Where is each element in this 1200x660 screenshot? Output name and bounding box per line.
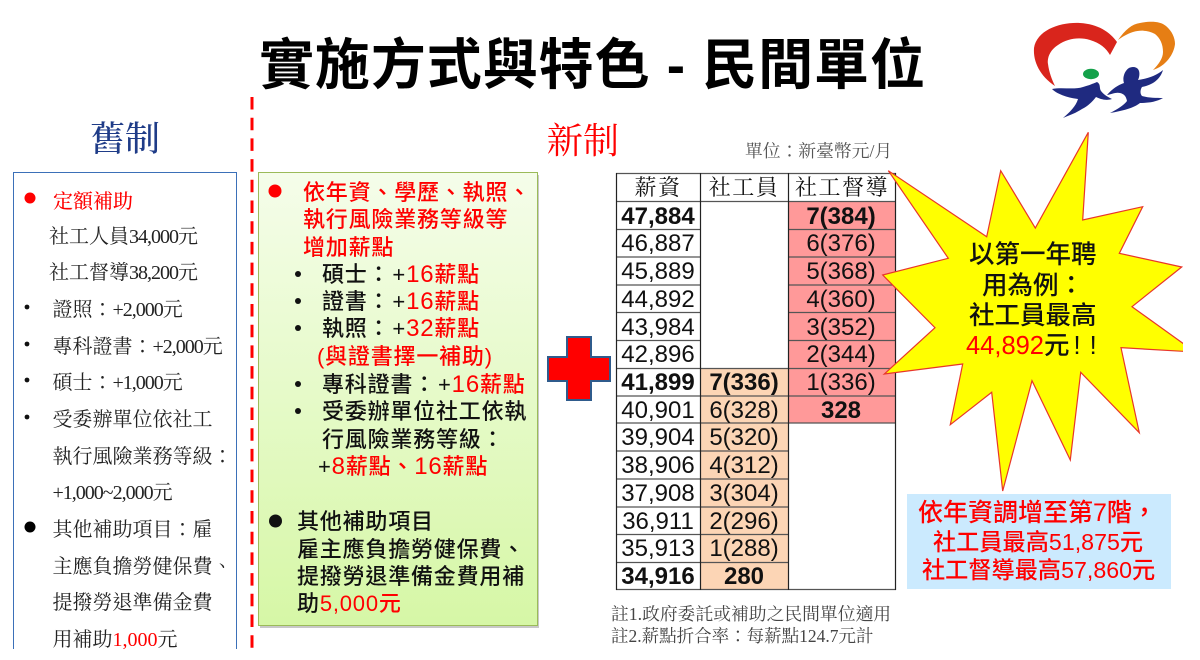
salary column: 45,889 xyxy=(621,258,695,285)
text: staff amounts: 社工人員34,000元 xyxy=(49,225,198,248)
salary column: 35,913 xyxy=(621,535,695,562)
salary column xyxy=(621,203,695,590)
salary column: 47,884 xyxy=(621,203,695,230)
table header xyxy=(635,176,886,197)
unit label: 單位：新臺幣元/月 xyxy=(745,140,892,161)
callout text: 社工員最高51,875元 xyxy=(933,529,1143,555)
bullet list: add-ons: 執行風險業務等級： xyxy=(52,445,232,468)
text: other subsidy: 主應負擔勞健保費、 xyxy=(52,555,232,578)
panel: old system xyxy=(14,172,236,660)
text: other subsidy: 提撥勞退準備金費 xyxy=(52,591,213,614)
salary column: 44,892 xyxy=(621,286,695,313)
bullet list: points: 執照：+32薪點 xyxy=(322,315,480,342)
callout text: 以第一年聘 xyxy=(969,241,1097,269)
text: other items: 提撥勞退準備金費用補 xyxy=(297,564,525,589)
text: salary points heading: 增加薪點 xyxy=(303,235,394,260)
social worker column: 7(336) xyxy=(709,369,779,396)
social worker column xyxy=(709,369,779,590)
salary column: 42,896 xyxy=(621,341,695,368)
table grid xyxy=(616,173,896,590)
text: other items xyxy=(297,509,525,616)
logo: left navy figure xyxy=(1052,82,1112,118)
logo: green dot xyxy=(1083,69,1099,79)
bullet list: points: 碩士：+16薪點 xyxy=(322,261,480,288)
callout text: 社工員最高 xyxy=(969,302,1097,330)
salary column: 46,887 xyxy=(621,230,695,257)
bullet: salary points xyxy=(268,184,282,198)
text: staff amounts: 社工督導38,200元 xyxy=(49,261,198,284)
dashed divider xyxy=(250,97,254,660)
bullet: other subsidy xyxy=(24,522,36,532)
salary column: 37,908 xyxy=(621,480,695,507)
text: other subsidy: 用補助1,000元 xyxy=(52,628,178,651)
heading: old system: 舊制 xyxy=(90,120,160,159)
social worker column: 2(296) xyxy=(709,508,779,535)
bullet: other items xyxy=(269,514,282,528)
bullet list: add-ons: 碩士：+1,000元 xyxy=(52,371,183,394)
bullet list: add-ons: 證照：+2,000元 xyxy=(52,298,183,321)
bullet list: points: +8薪點、16薪點 xyxy=(318,453,488,480)
panel: new system xyxy=(258,172,539,628)
supervisor column: 6(376) xyxy=(806,230,876,257)
salary column: 39,904 xyxy=(621,424,695,451)
callout text: 44,892元! ! xyxy=(966,332,1097,360)
table header: 社工督導 xyxy=(795,175,889,200)
text: salary points heading: 依年資、學歷、執照、 xyxy=(303,180,531,205)
callout: seniority maximum xyxy=(907,494,1171,589)
text: other subsidy: 其他補助項目：雇 xyxy=(52,518,212,541)
table cell fills xyxy=(700,202,896,590)
bullet list: points: 受委辦單位社工依執 xyxy=(322,399,527,424)
social worker column: 280 xyxy=(724,563,764,590)
salary column: 36,911 xyxy=(622,508,694,535)
text: other items: 其他補助項目 xyxy=(297,509,434,534)
social worker column: 6(328) xyxy=(709,397,779,424)
supervisor column: 1(336) xyxy=(806,369,876,396)
salary column: 41,899 xyxy=(621,369,695,396)
notes xyxy=(611,604,891,646)
social worker column: 5(320) xyxy=(709,424,779,451)
icon: plus xyxy=(548,337,610,400)
social worker column: 4(312) xyxy=(709,452,779,479)
social worker column: 1(288) xyxy=(709,535,779,562)
text: other subsidy xyxy=(52,518,232,651)
supervisor column: 5(368) xyxy=(806,258,876,285)
salary column: 34,916 xyxy=(621,563,695,590)
table header: 社工員 xyxy=(709,175,779,200)
bullet list: add-ons xyxy=(25,298,232,504)
text: other items: 雇主應負擔勞健保費、 xyxy=(297,537,525,562)
text: fixed subsidy: 定額補助 xyxy=(53,190,133,213)
callout text: 用為例： xyxy=(982,272,1084,300)
supervisor column xyxy=(806,203,876,424)
text: staff amounts xyxy=(49,225,198,284)
social worker column: 3(304) xyxy=(709,480,779,507)
callout text xyxy=(918,499,1157,583)
callout text: 依年資調增至第7階， xyxy=(918,499,1157,527)
supervisor column: 7(384) xyxy=(806,203,876,230)
supervisor column: 2(344) xyxy=(806,341,876,368)
bullet list: points: 行風險業務等級： xyxy=(322,427,504,452)
table header: 薪資 xyxy=(634,175,682,200)
bullet list: points xyxy=(295,261,527,480)
salary table xyxy=(616,173,896,590)
salary column: 38,906 xyxy=(621,452,695,479)
bullet list: add-ons: +1,000~2,000元 xyxy=(52,482,173,504)
text: salary points heading xyxy=(303,180,531,260)
salary column: 40,901 xyxy=(621,397,695,424)
callout: starburst xyxy=(883,132,1195,491)
supervisor column: 328 xyxy=(821,397,861,424)
notes: 註1.政府委託或補助之民間單位適用 xyxy=(611,604,891,624)
callout text: 社工督導最高57,860元 xyxy=(922,557,1155,583)
title: 實施方式與特色 - 民間單位 xyxy=(259,34,925,96)
logo: orange heart arc xyxy=(1118,22,1175,70)
bullet list: points: 專科證書：+16薪點 xyxy=(322,371,526,398)
text: salary points heading: 執行風險業務等級等 xyxy=(303,207,508,232)
logo: red heart arc xyxy=(1034,23,1117,86)
bullet list: add-ons: 受委辦單位依社工 xyxy=(52,408,212,431)
heading: new system: 新制 xyxy=(547,121,619,161)
logo xyxy=(1034,22,1175,118)
callout text xyxy=(966,241,1097,360)
text: other items: 助5,000元 xyxy=(297,591,402,616)
supervisor column: 4(360) xyxy=(806,286,876,313)
bullet list: points: (與證書擇一補助) xyxy=(317,344,493,369)
bullet: fixed subsidy xyxy=(24,192,36,204)
logo: right navy figure xyxy=(1107,67,1163,113)
bullet list: points: 證書：+16薪點 xyxy=(322,288,480,315)
salary column: 43,984 xyxy=(621,314,695,341)
supervisor column: 3(352) xyxy=(806,314,876,341)
notes: 註2.薪點折合率：每薪點124.7元計 xyxy=(611,626,874,646)
bullet list: add-ons: 專科證書：+2,000元 xyxy=(52,335,223,358)
